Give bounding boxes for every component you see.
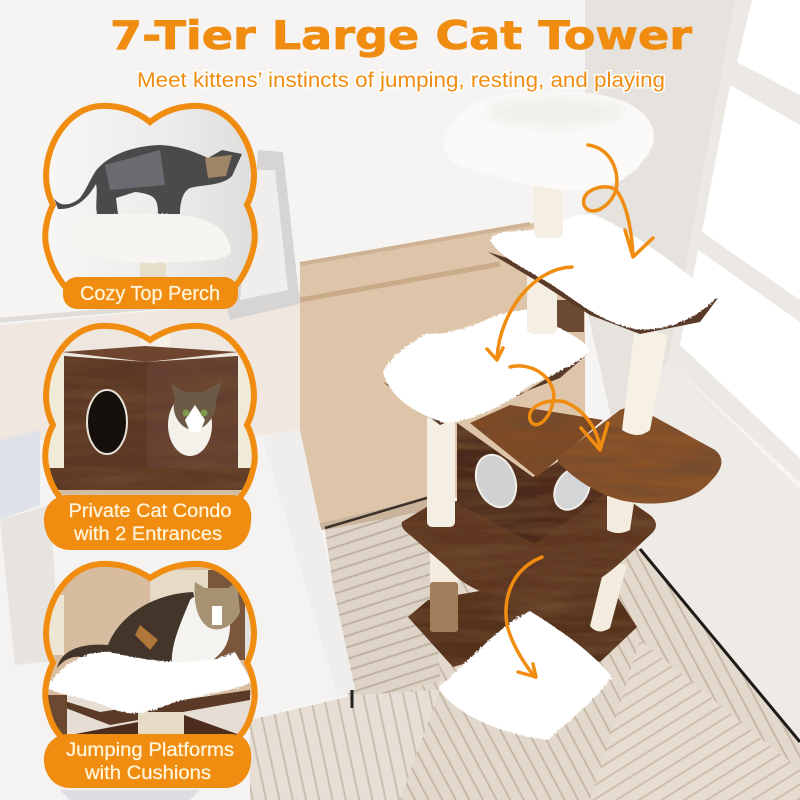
panel: private cat condo (40, 320, 260, 550)
label pill (44, 495, 251, 550)
right hole with cat (168, 382, 222, 456)
label text: Private Cat Condo (68, 500, 232, 522)
label text: Cozy Top Perch (80, 283, 220, 305)
top perch (444, 91, 654, 190)
level 1 board (402, 480, 656, 600)
label text: with 2 Entrances (73, 523, 222, 545)
arrow 1 (584, 145, 653, 257)
arrow 4 (506, 557, 542, 677)
condo (62, 346, 238, 362)
subtitle: Meet kittens’ instincts of jumping, resting, and playing (137, 69, 665, 92)
sofa and pillows (0, 430, 355, 800)
label pill (44, 734, 251, 788)
right platform (558, 407, 721, 504)
base board (408, 570, 637, 667)
cat tower (383, 91, 721, 740)
bed (114, 212, 232, 264)
platform 2 cushion (488, 214, 718, 334)
fur cushion (47, 652, 252, 713)
condo cube (457, 405, 610, 545)
baseboard (300, 497, 430, 530)
condo holes (469, 449, 523, 513)
calico cat (57, 582, 240, 668)
tan wainscot wall (300, 218, 585, 528)
platform 3 cushion (383, 310, 590, 425)
label pill (63, 277, 238, 309)
picture frame (220, 150, 300, 320)
panel: cozy top perch (40, 100, 260, 309)
shelf (45, 468, 255, 490)
window frame (668, 0, 800, 482)
center post (527, 270, 557, 334)
panel: jumping platforms (40, 560, 260, 788)
tall right post (622, 325, 668, 435)
orange jump arrows (487, 145, 653, 677)
left wainscot (0, 298, 300, 440)
mid posts (607, 496, 635, 533)
back board behind cushions (557, 300, 584, 332)
left hole (87, 390, 127, 454)
window panes (737, 0, 800, 95)
post (140, 262, 166, 277)
wood under (67, 695, 252, 734)
tabby cat (54, 145, 242, 214)
right wall (585, 0, 800, 745)
upper post (534, 180, 563, 238)
label text: with Cushions (84, 762, 211, 784)
label text: Jumping Platforms (66, 739, 234, 761)
arrow 3 (510, 366, 608, 450)
floor cushion (438, 611, 612, 740)
rug (250, 497, 800, 800)
arrow 2 (487, 267, 572, 360)
lower posts (430, 550, 627, 632)
title: 7-Tier Large Cat Tower (110, 14, 693, 59)
